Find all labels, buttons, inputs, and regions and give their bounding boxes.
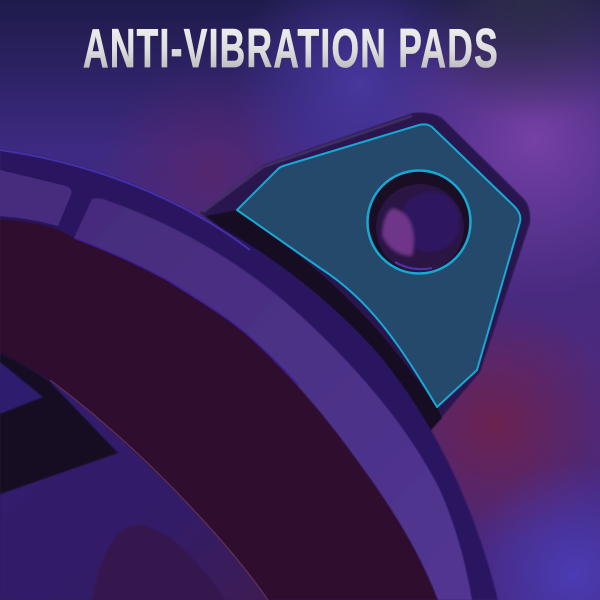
dark maroon inner ring bbox=[0, 219, 438, 600]
fan hub shape bbox=[92, 525, 225, 600]
band lower edge bbox=[74, 238, 298, 385]
black fan blade wedge bbox=[0, 353, 118, 494]
light band segment left bbox=[0, 170, 71, 226]
fan frame outer ring bbox=[0, 149, 498, 600]
inner rim line bbox=[50, 380, 268, 600]
mounting hole bbox=[368, 170, 470, 274]
anti-vibration pad bbox=[237, 124, 520, 407]
light band segment right bbox=[74, 198, 472, 600]
fan frame highlight edge bbox=[0, 150, 250, 250]
lower fan interior bbox=[0, 353, 268, 600]
fan mounting corner body bbox=[200, 113, 530, 431]
